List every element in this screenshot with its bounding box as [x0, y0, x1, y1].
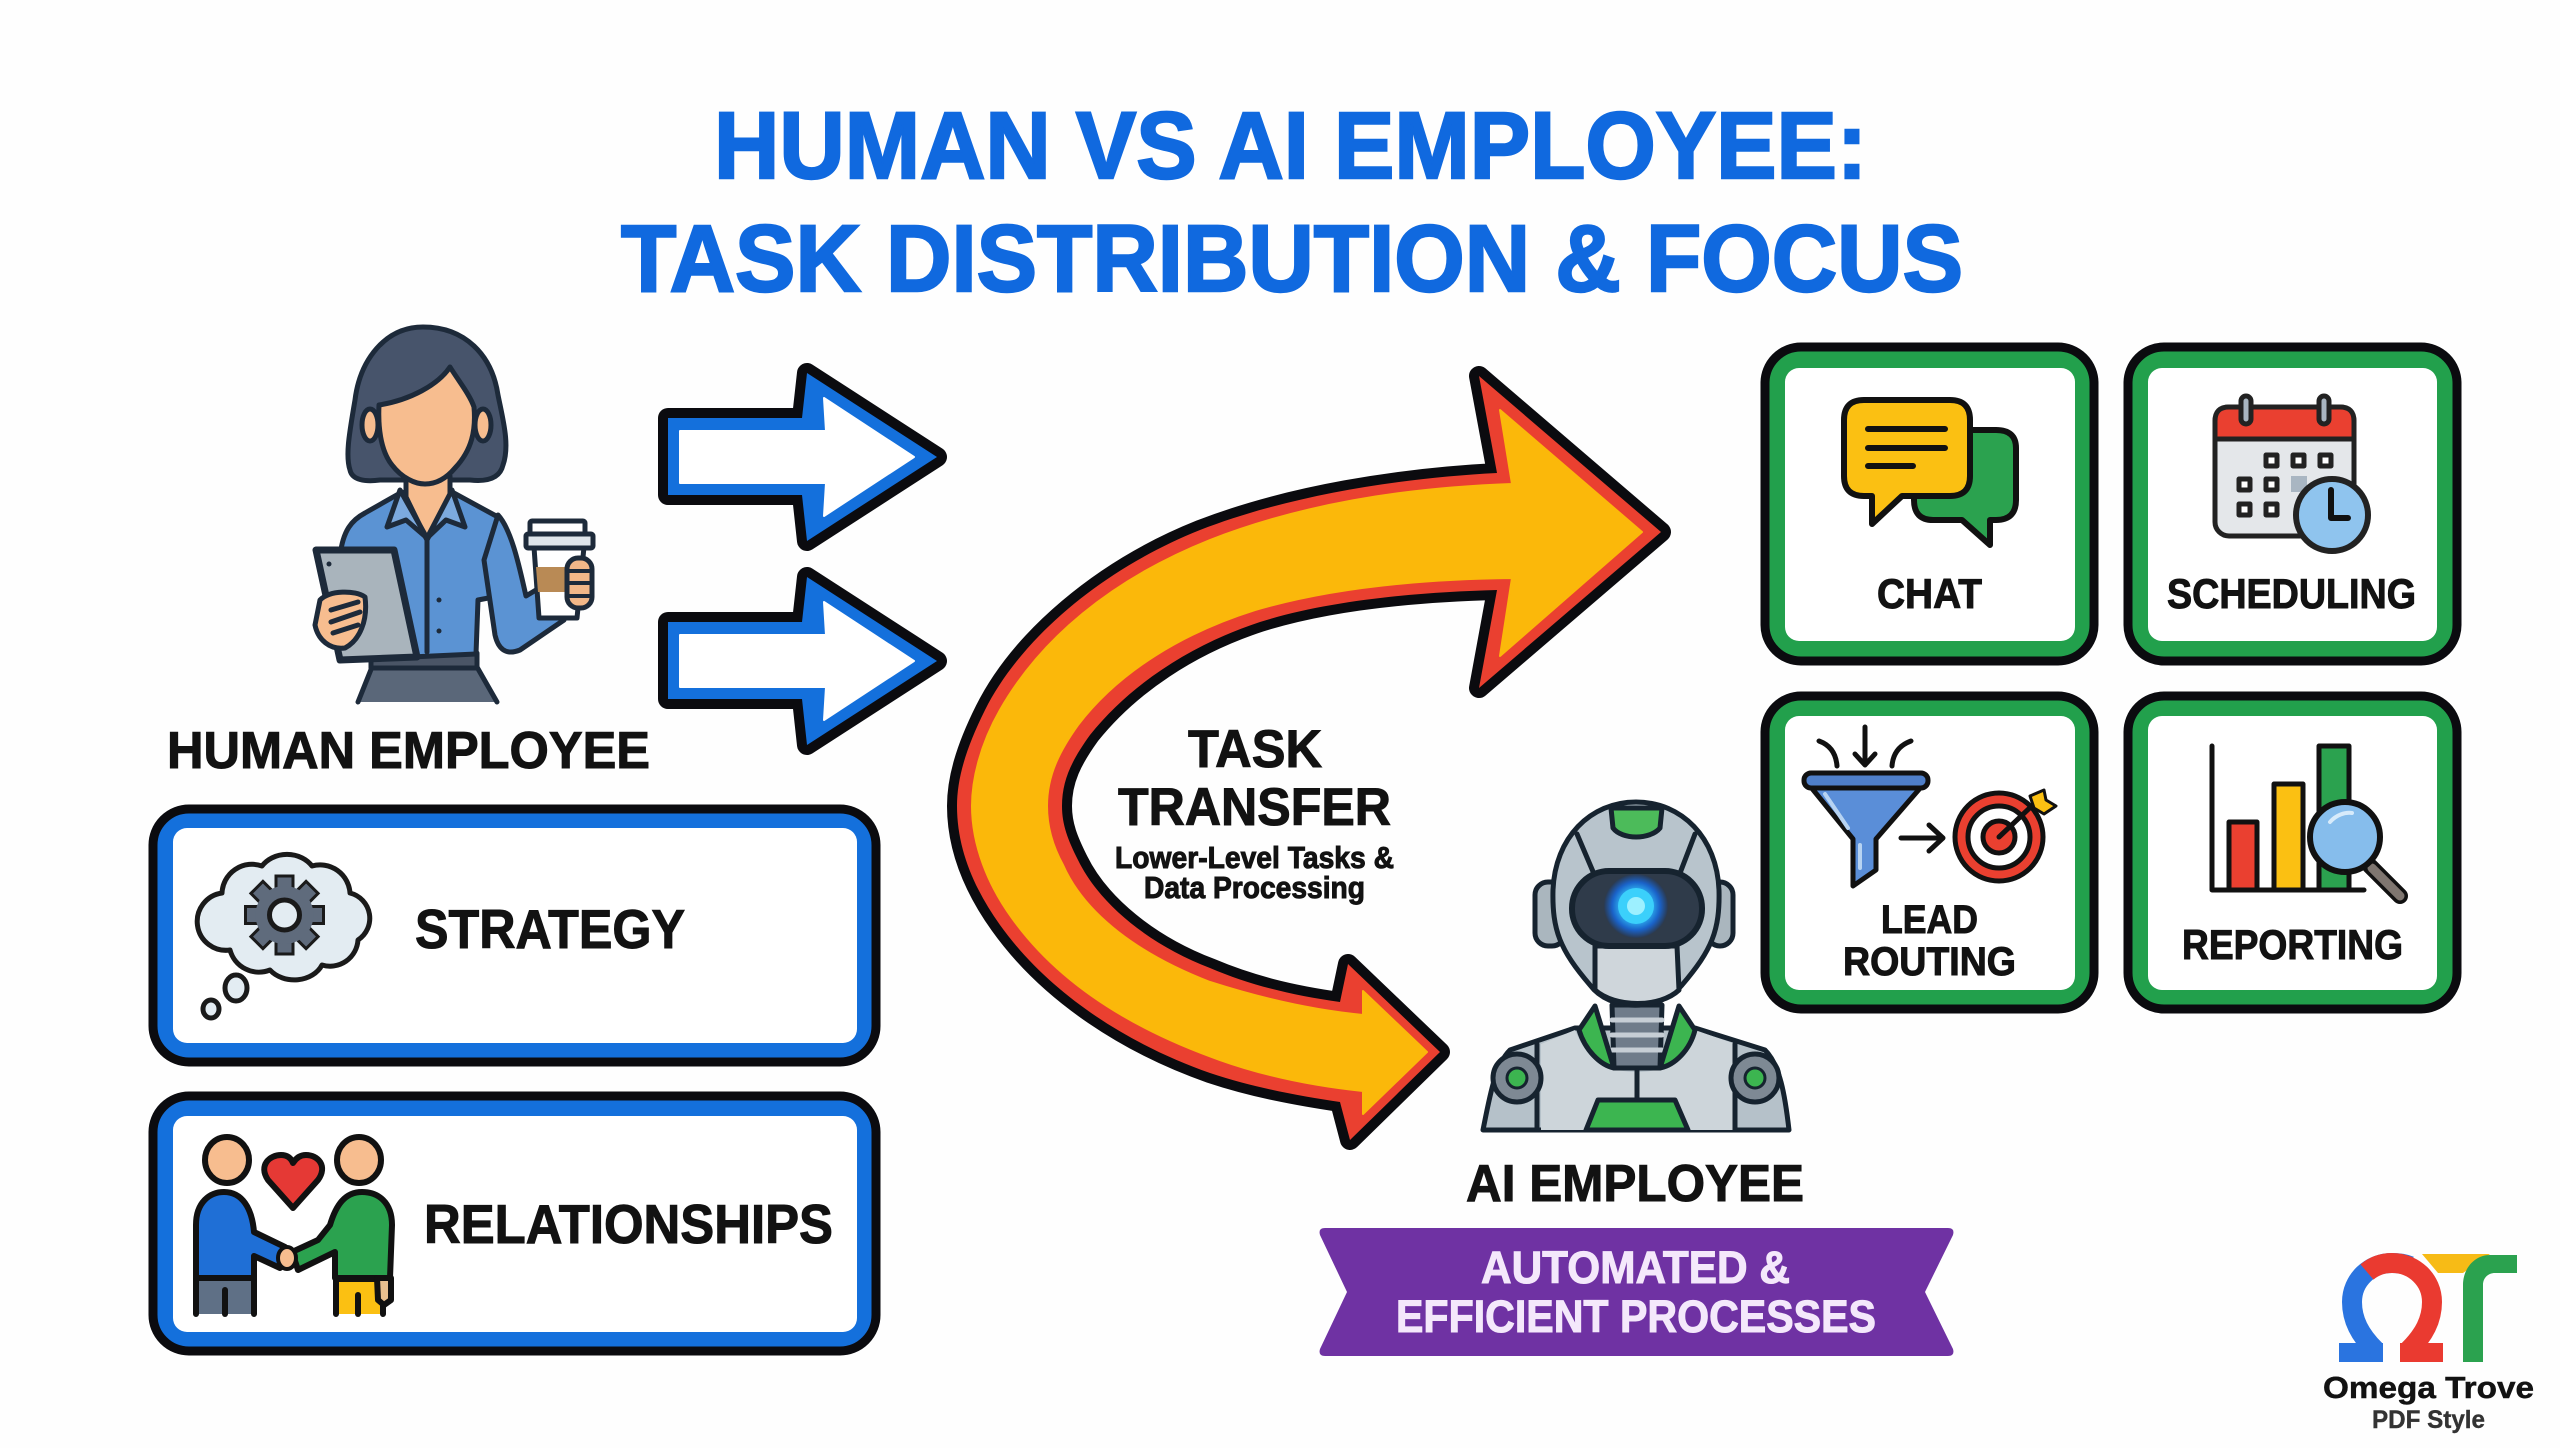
icon: AI robot [1483, 802, 1789, 1130]
icon: human employee figure [315, 327, 593, 702]
panel: relationships [153, 1096, 876, 1351]
banner: automated and efficient processes: AUTOMATED & [1481, 1242, 1790, 1293]
label: scheduling: SCHEDULING [2167, 570, 2416, 617]
arrow: human upper [668, 373, 937, 541]
panel: lead routing [1765, 696, 2094, 1009]
label: strategy: STRATEGY [415, 898, 685, 960]
label: lead routing: LEAD [1881, 898, 1978, 942]
banner: automated and efficient processes [1320, 1228, 1953, 1356]
text: task transfer: TASK [1188, 720, 1322, 779]
banner: automated and efficient processes: EFFICIENT PROCESSES [1396, 1291, 1876, 1342]
label: reporting: REPORTING [2182, 921, 2403, 968]
logo: Omega Trove: PDF Style [2372, 1406, 2485, 1434]
icon: funnel to target [1804, 727, 2056, 886]
title [621, 93, 1963, 312]
label: relationships: RELATIONSHIPS [424, 1193, 833, 1255]
panel: reporting [2128, 696, 2457, 1009]
icon: handshake with heart [196, 1137, 392, 1314]
arrow: human lower [668, 577, 937, 745]
label: lead routing: ROUTING [1843, 940, 2016, 984]
label: chat: CHAT [1877, 570, 1982, 617]
title: HUMAN VS AI EMPLOYEE: [714, 93, 1867, 199]
text: task transfer [1115, 720, 1394, 905]
icon: chat bubbles [1844, 400, 2016, 545]
icon: bar chart with magnifier [2212, 746, 2400, 896]
title: TASK DISTRIBUTION & FOCUS [621, 206, 1963, 312]
panel: scheduling [2128, 347, 2457, 661]
text: task transfer: TRANSFER [1118, 778, 1391, 837]
icon: calendar with clock [2215, 396, 2368, 551]
text: task transfer: Data Processing [1144, 870, 1365, 905]
panel: chat [1765, 347, 2094, 661]
label: human employee: HUMAN EMPLOYEE [167, 722, 650, 780]
label: AI employee: AI EMPLOYEE [1466, 1155, 1804, 1213]
logo: Omega Trove: Omega Trove [2323, 1370, 2534, 1405]
logo: Omega Trove [2323, 1254, 2534, 1434]
arrow: task transfer curved double-head [957, 376, 1661, 1140]
text: task transfer: Lower-Level Tasks & [1115, 840, 1394, 875]
panel: strategy [153, 809, 876, 1062]
label: lead routing [1843, 898, 2016, 984]
icon: thought cloud with gear [197, 854, 370, 1018]
